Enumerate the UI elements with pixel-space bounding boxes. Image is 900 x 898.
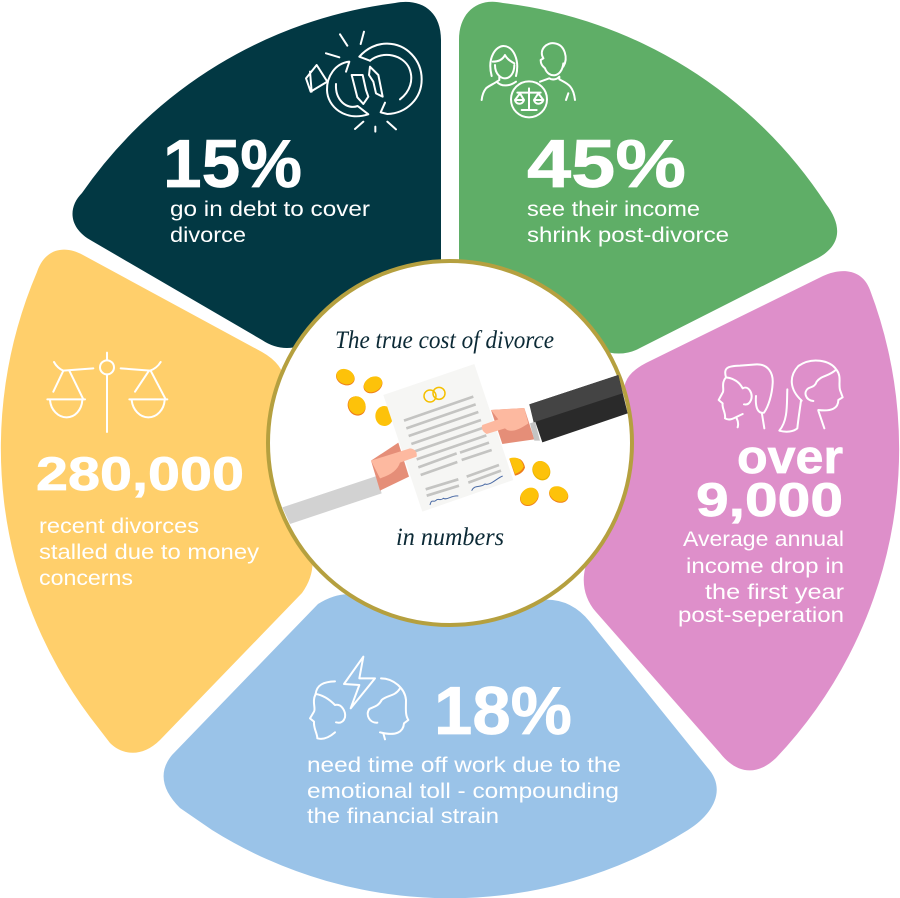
text: need time off work: the financial strain bbox=[307, 805, 499, 828]
stat: over 9,000 bbox=[696, 430, 843, 526]
subtitle: in numbers: in numbers bbox=[396, 524, 504, 551]
panel: 15% go in debt bbox=[73, 2, 441, 348]
text: average annual income drop: the first year bbox=[705, 581, 844, 604]
text: go in debt to cover divorce: divorce bbox=[170, 224, 246, 247]
text: see their income shrink post-divorce: shrink post-divorce bbox=[527, 224, 729, 247]
left arm and hand bbox=[282, 443, 417, 524]
text: see their income shrink post-divorce: see their income bbox=[527, 198, 700, 221]
panel: 280,000 divorces stalled bbox=[1, 250, 313, 753]
text: recent divorces stalled: recent divorces bbox=[39, 515, 199, 538]
illustration: hands exchanging divorce contract and coins bbox=[282, 364, 628, 524]
text: recent divorces stalled: stalled due to money bbox=[39, 541, 260, 564]
text: recent divorces stalled bbox=[39, 515, 260, 590]
icon: two heads with lightning bolt bbox=[310, 657, 408, 739]
text: see their income shrink post-divorce bbox=[527, 198, 729, 247]
text: average annual income drop bbox=[678, 528, 844, 627]
text: recent divorces stalled: concerns bbox=[39, 567, 133, 590]
stat: 18%: 18% bbox=[434, 673, 572, 749]
stat: over 9,000: over bbox=[737, 430, 843, 483]
stat: 15%: 15% bbox=[163, 126, 302, 202]
document bbox=[383, 364, 513, 512]
right arm and hand bbox=[482, 375, 628, 444]
stat: 45%: 45% bbox=[527, 126, 686, 202]
icon: balance scales bbox=[47, 353, 167, 432]
icon: couple with scales bbox=[482, 43, 575, 117]
coins lower right bbox=[509, 458, 571, 510]
text: need time off work: emotional toll - compounding bbox=[307, 780, 619, 803]
icon: two heads facing apart bbox=[719, 360, 843, 432]
text: go in debt to cover divorce: go in debt to cover bbox=[170, 198, 370, 221]
coins upper left bbox=[333, 366, 393, 426]
text: need time off work bbox=[307, 754, 621, 828]
text: go in debt to cover divorce bbox=[170, 198, 370, 247]
text: average annual income drop: income drop in bbox=[686, 555, 844, 578]
stat: 280,000: 280,000 bbox=[36, 447, 244, 500]
text: average annual income drop: post-seperation bbox=[678, 604, 844, 627]
text: average annual income drop: Average annual bbox=[683, 528, 844, 551]
stat: over 9,000: 9,000 bbox=[696, 473, 843, 526]
panel: 18% need time off work bbox=[164, 594, 717, 898]
text: need time off work: need time off work due to the bbox=[307, 754, 621, 777]
icon: broken ring bbox=[306, 32, 422, 132]
title: the true cost of divorce: The true cost of divorce bbox=[335, 327, 554, 354]
center circle bbox=[268, 261, 632, 625]
panel: over 9,000 income drop bbox=[584, 271, 899, 770]
panel: 45% see income shrink bbox=[459, 2, 837, 354]
